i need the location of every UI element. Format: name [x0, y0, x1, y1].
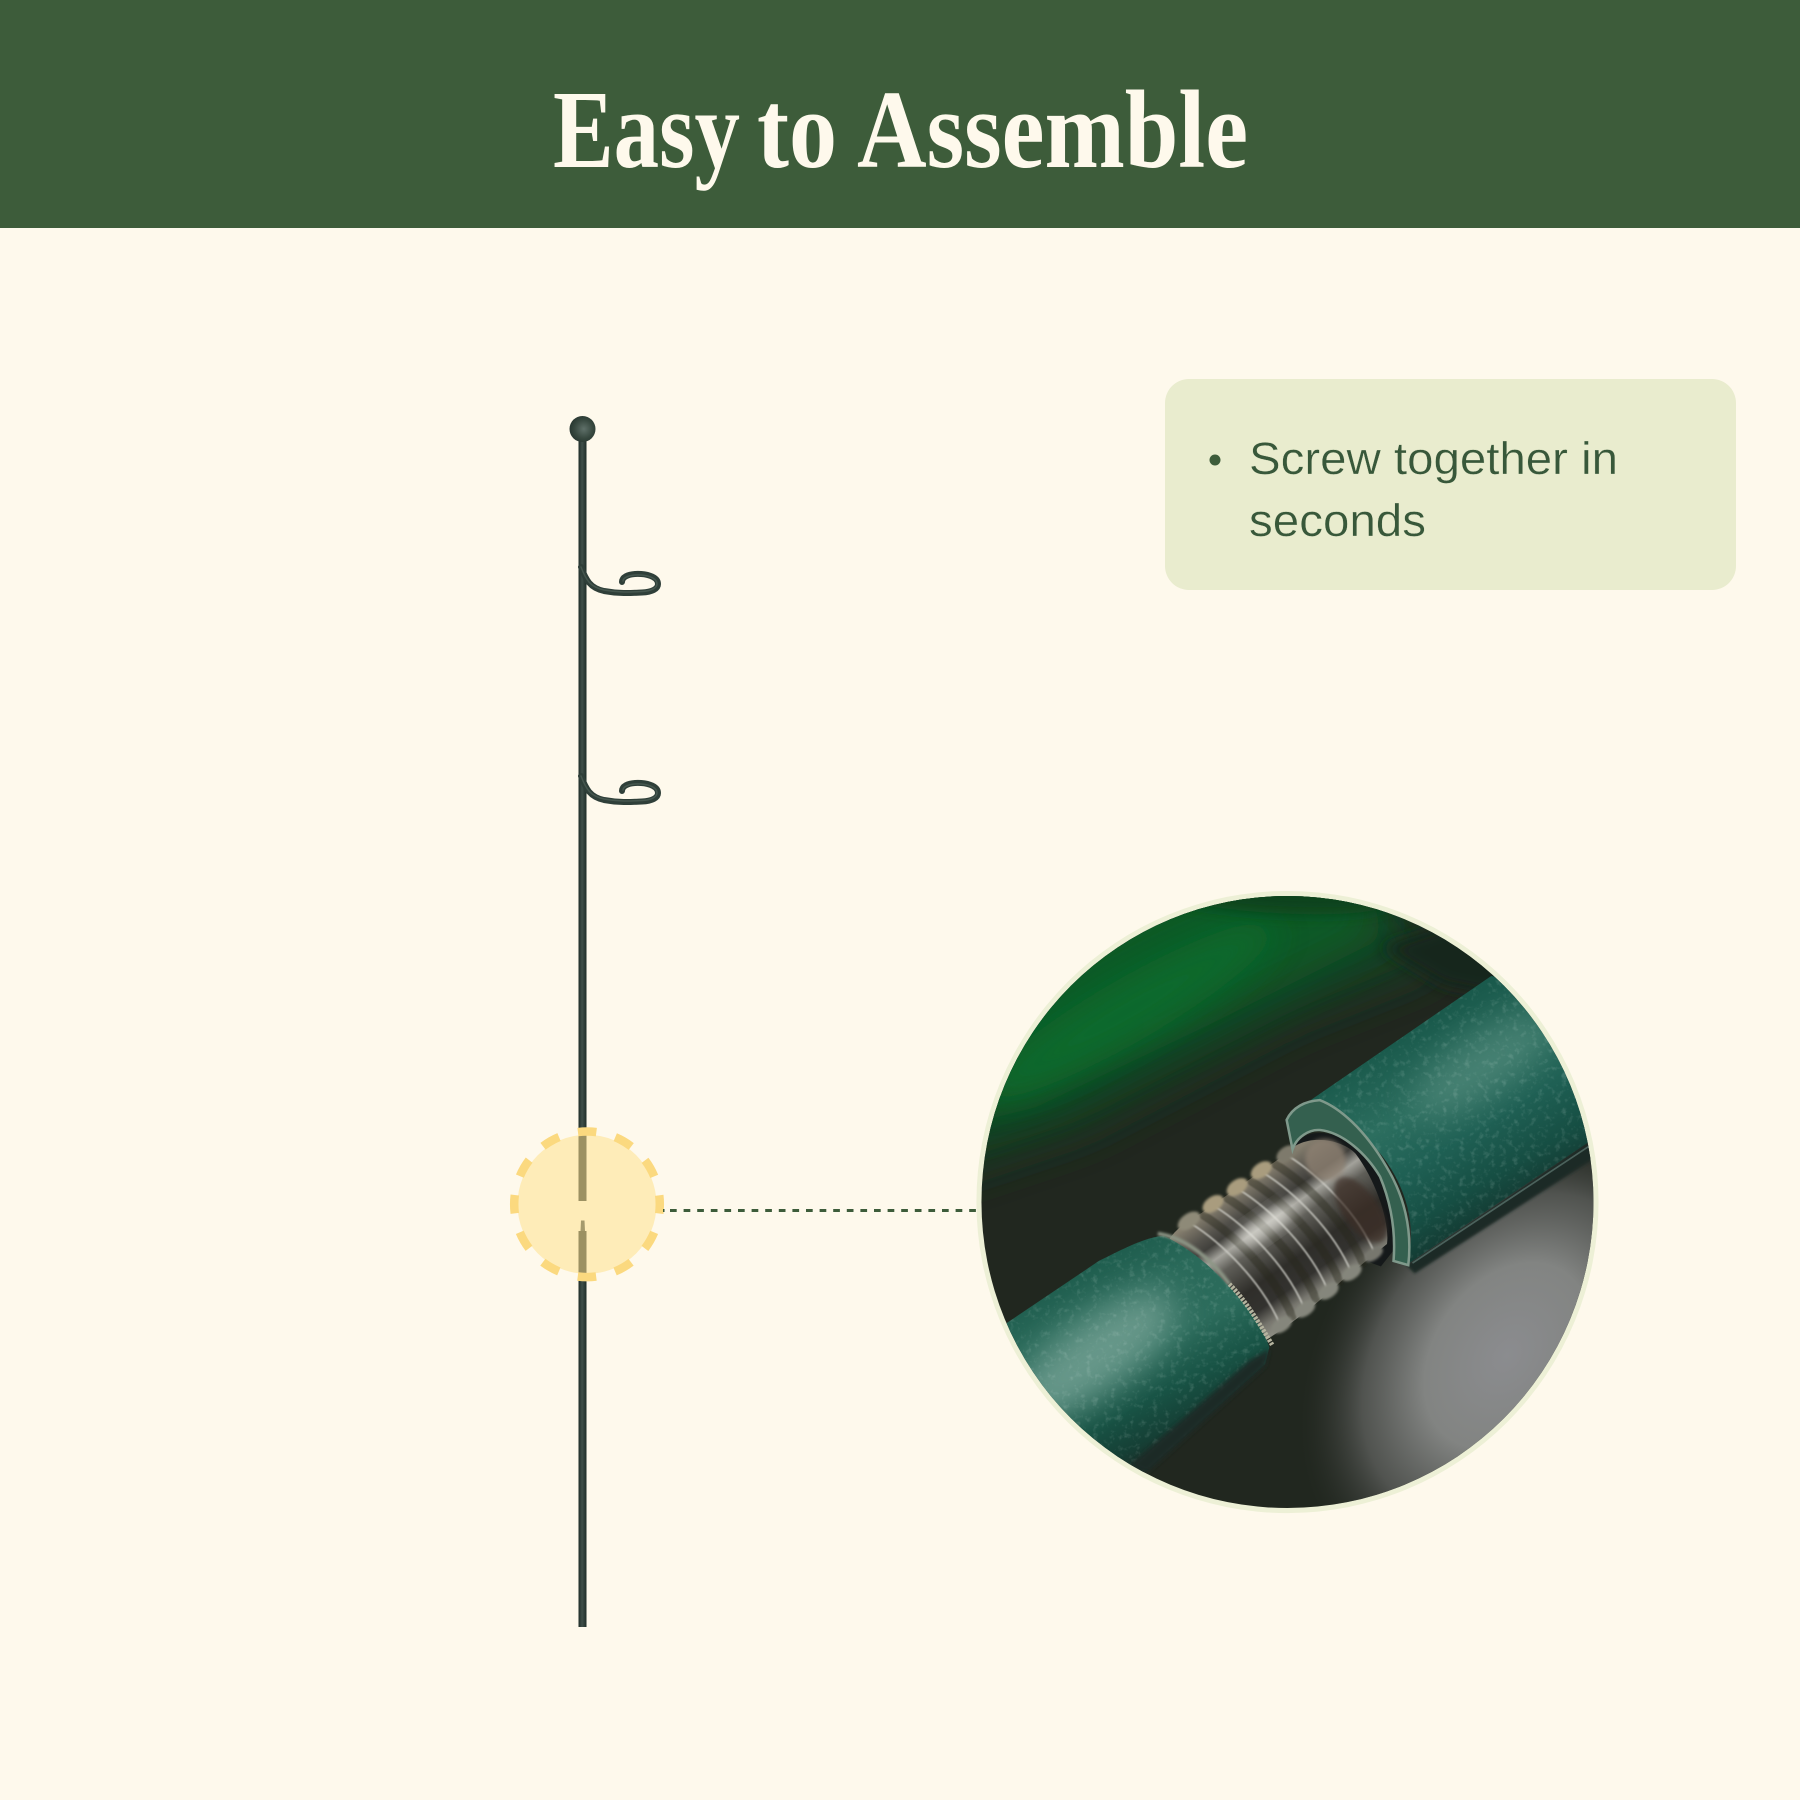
callout text — [1249, 433, 1618, 546]
bullet — [1210, 454, 1220, 466]
background blur: grey — [1322, 1157, 1594, 1504]
bright glint — [1230, 1195, 1301, 1254]
lower cylinder underside — [1130, 1349, 1269, 1473]
dashed ring — [514, 1132, 660, 1277]
photo border ring — [976, 891, 1599, 1513]
rust area — [1331, 1174, 1388, 1244]
title: Easy — [553, 69, 740, 192]
header band — [0, 0, 1800, 228]
title: to — [757, 69, 837, 192]
metal thread — [1170, 1136, 1388, 1340]
stake ball finial — [570, 416, 596, 442]
lower spiral hook — [581, 776, 658, 802]
plant support stake — [570, 416, 658, 1627]
background blur: green — [982, 896, 1520, 1192]
callout text: Screw together in — [1249, 433, 1618, 484]
callout: feature list — [1165, 379, 1736, 590]
photo content — [981, 896, 1594, 1508]
upper spiral hook — [581, 567, 658, 593]
callout text: seconds — [1249, 495, 1426, 546]
thread ridges — [1192, 1157, 1374, 1321]
thread crests — [1176, 1144, 1384, 1335]
rear cylinder underside — [1406, 1143, 1602, 1274]
lower cylinder body — [995, 1236, 1269, 1482]
title: Assemble — [857, 69, 1248, 192]
rod segments through highlight — [578, 1132, 586, 1275]
upper cylinder frayed collar — [1287, 1100, 1409, 1265]
upper cylinder body — [1310, 976, 1588, 1262]
dark socket — [1293, 1133, 1394, 1266]
zoom photo: threaded joint — [976, 891, 1598, 1513]
stake rod — [578, 430, 586, 1627]
lower cylinder crimp edge — [1158, 1234, 1272, 1345]
highlight circle on joint — [514, 1132, 660, 1277]
dotted connector line — [663, 1209, 982, 1212]
